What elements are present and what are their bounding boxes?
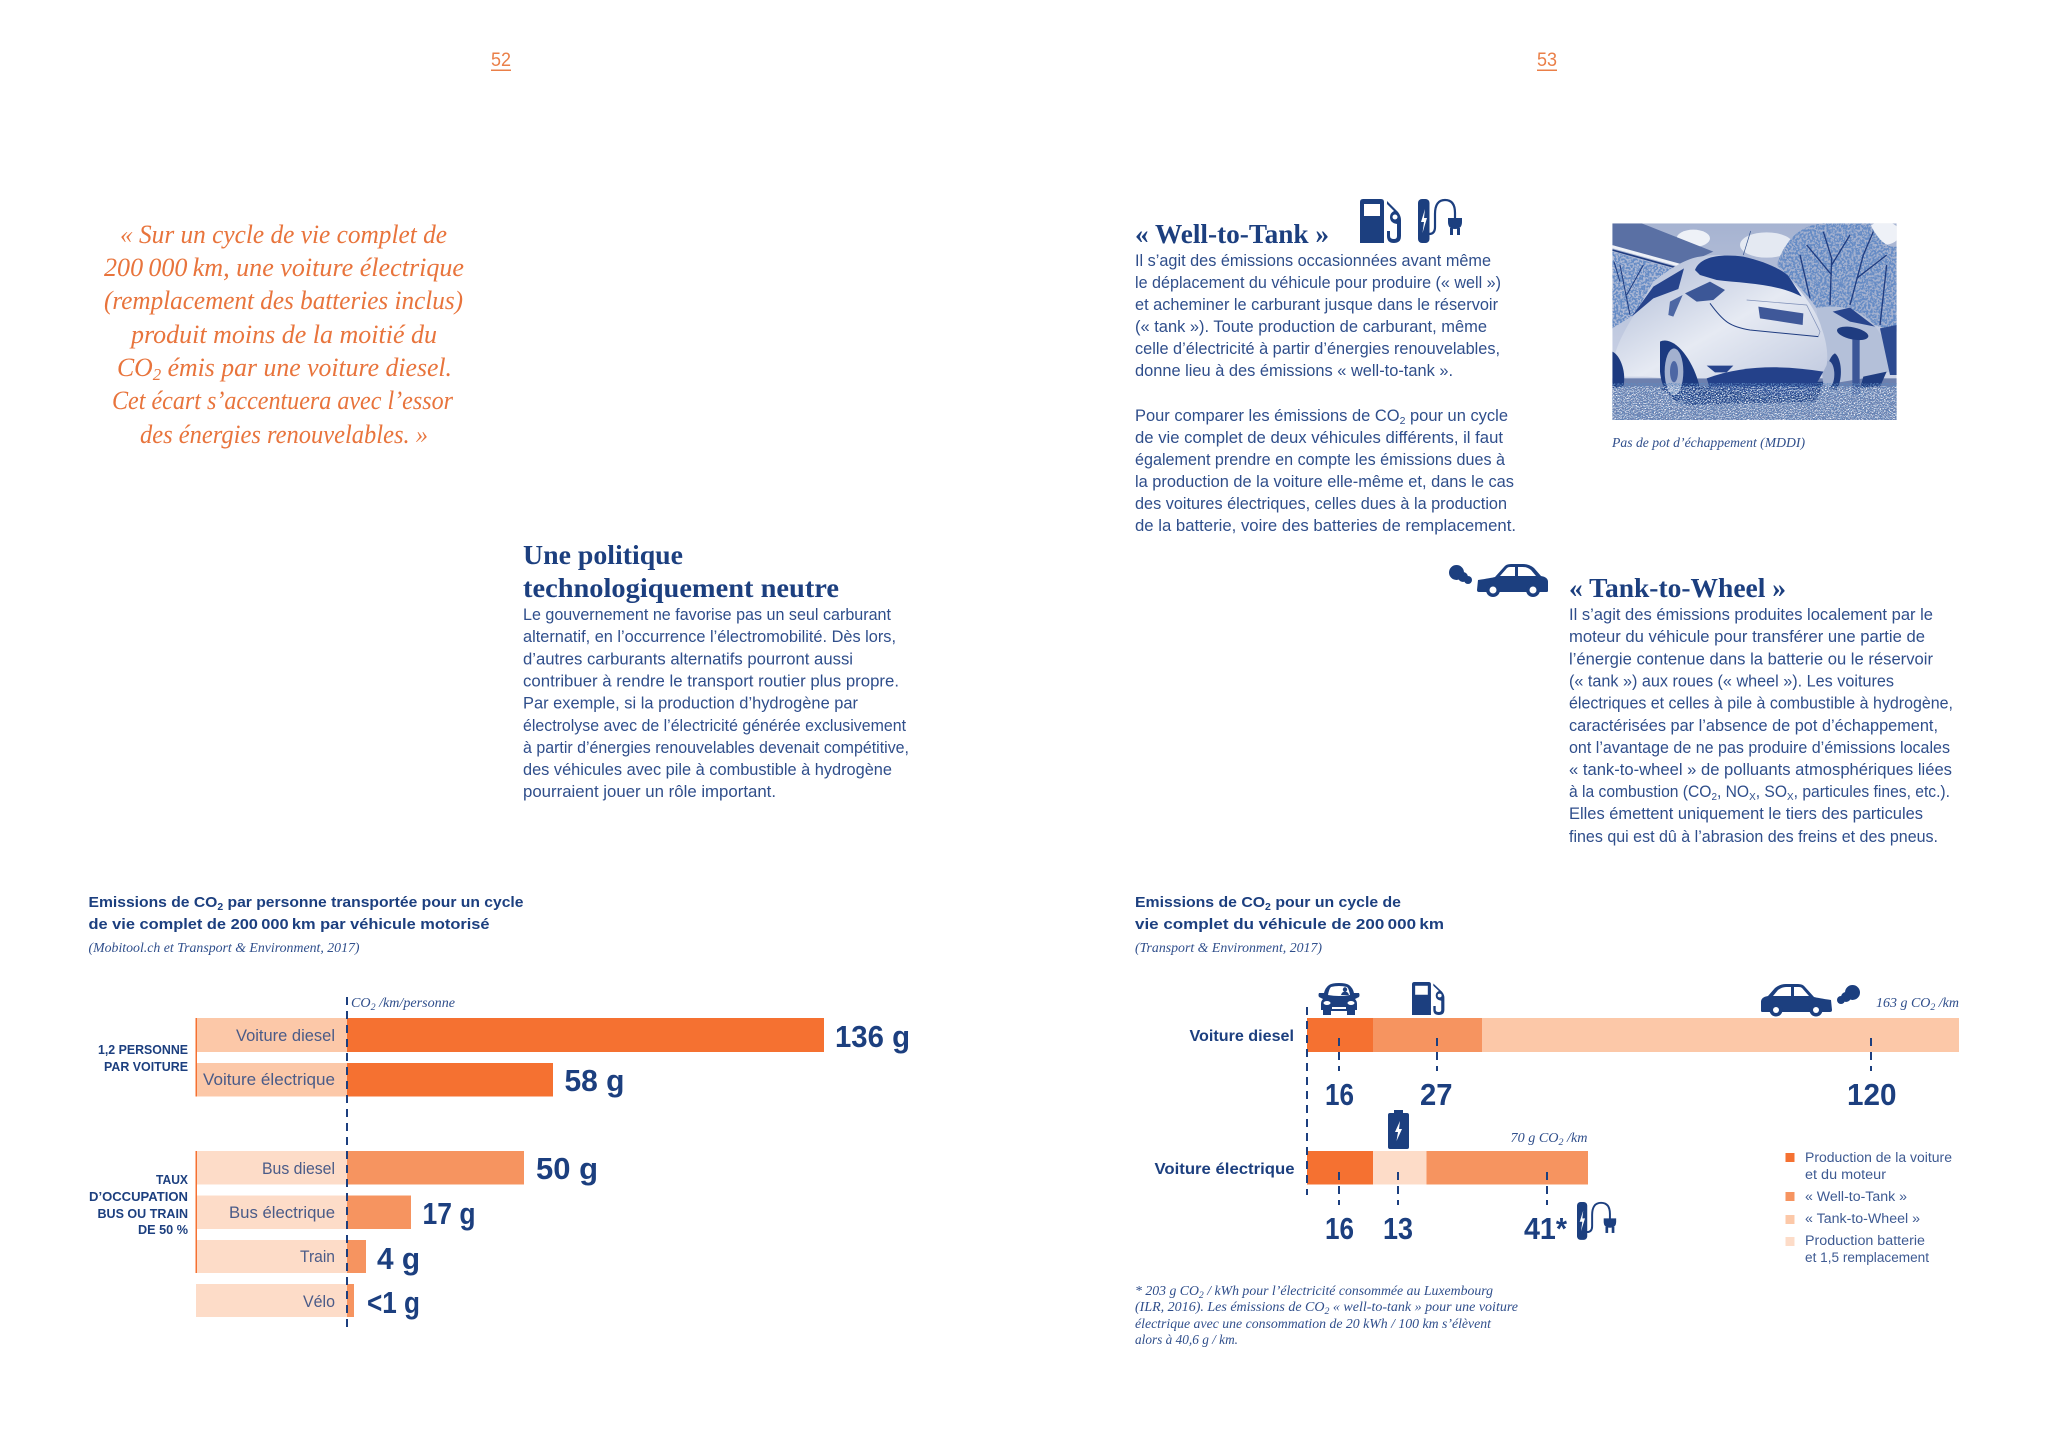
footnote	[1135, 1283, 1518, 1347]
group label: 1,2 personne	[98, 1018, 197, 1096]
text block: Well-to-Tank: et acheminer le carburant jusque dans le réservoir	[1135, 296, 1498, 314]
chart title: emissions per vehicle: 2	[1265, 902, 1271, 913]
icon: car with exhaust smoke	[1449, 564, 1548, 597]
values: diesel	[1325, 1077, 1896, 1112]
icon: car front with driver	[1318, 983, 1360, 1015]
text block: Tank-to-Wheel: ont l’avantage de ne pas produire d’émissions locales	[1569, 739, 1950, 757]
heading: Une politique technologiquement neutre: Une politique	[523, 539, 683, 570]
row: voiture electrique	[196, 1063, 624, 1098]
chart title: emissions per vehicle: vie complet du véhicule de 200 000 km	[1135, 916, 1444, 933]
photo caption: Pas de pot d’échappement (MDDI)	[1611, 435, 1806, 450]
total: 163 g: 2	[1930, 1003, 1936, 1013]
group label: 1,2 personne: PAR VOITURE	[104, 1059, 188, 1074]
group label: taux d'occupation	[89, 1151, 197, 1273]
footnote: 2	[1199, 1291, 1204, 1301]
chart title: emissions per vehicle: pour un cycle de	[1271, 894, 1401, 911]
footnote: / kWh pour l’électricité consommée au Luxembourg	[1204, 1283, 1493, 1298]
row: bus electrique: Bus électrique	[229, 1204, 335, 1222]
total: 70 g: 70 g CO	[1510, 1130, 1556, 1145]
row: bus electrique: 17 g	[422, 1196, 476, 1231]
text block: Tank-to-Wheel: X	[1749, 791, 1756, 803]
values: electrique: 13	[1383, 1211, 1413, 1246]
text block: Tank-to-Wheel: à la combustion (CO	[1569, 783, 1719, 801]
row: velo: Vélo	[303, 1293, 335, 1311]
chart title: emissions per person: de vie complet de 200 000 km par véhicule motorisé	[88, 916, 490, 933]
chart title: emissions per person: (Mobitool.ch et Transport & Environment, 2017)	[88, 940, 360, 955]
group label: taux d'occupation: BUS OU TRAIN	[98, 1206, 188, 1221]
row: voiture diesel: Voiture diesel	[236, 1027, 335, 1045]
text block: Tank-to-Wheel: fines qui est dû à l’abrasion des freins et des pneus.	[1569, 828, 1938, 846]
text block: politique neutre: des véhicules avec pile à combustible à hydrogène	[523, 761, 892, 779]
group label: taux d'occupation: TAUX	[156, 1172, 188, 1187]
text block: Tank-to-Wheel: (« tank ») aux roues (« wheel »). Les voitures	[1569, 673, 1894, 691]
heading: Une politique technologiquement neutre: technologiquement neutre	[523, 572, 839, 603]
icon: fuel pump	[1360, 199, 1401, 243]
footnote: 2	[1325, 1307, 1330, 1317]
row: train	[196, 1240, 420, 1276]
text block: Tank-to-Wheel: , NO	[1717, 783, 1749, 801]
axis and leader ticks	[1307, 1007, 1871, 1205]
total: 163 g: /km	[1935, 995, 1959, 1010]
row: bus electrique	[196, 1196, 476, 1231]
text block: Well-to-Tank: donne lieu à des émissions « well-to-tank ».	[1135, 362, 1453, 380]
pull quote: « Sur un cycle de vie complet de	[120, 220, 447, 249]
pull quote: Cet écart s’accentuera avec l’essor	[112, 386, 454, 415]
group label: taux d'occupation: DE 50 %	[138, 1222, 188, 1237]
row: bus diesel: Bus diesel	[262, 1160, 335, 1178]
icon: car with exhaust	[1761, 984, 1860, 1016]
row: train: Train	[300, 1248, 335, 1266]
text block: politique neutre: à partir d’énergies renouvelables devenait compétitive,	[523, 739, 909, 757]
icon: fuel pump small	[1412, 982, 1444, 1015]
chart title: emissions per vehicle: (Transport & Environment, 2017)	[1135, 940, 1323, 955]
pull quote: CO	[117, 353, 153, 382]
legend item: production batterie: et 1,5 remplacement	[1805, 1250, 1929, 1265]
text block: Well-to-Tank: le déplacement du véhicule pour produire (« well »)	[1135, 274, 1501, 292]
pull quote: 2	[153, 365, 162, 384]
text block: Tank-to-Wheel: caractérisées par l’absence de pot d’échappement,	[1569, 717, 1938, 735]
text block: Well-to-Tank	[1135, 252, 1516, 535]
chart title: emissions per person	[88, 894, 524, 955]
icon: battery	[1388, 1110, 1409, 1149]
row: bus diesel: 50 g	[536, 1151, 598, 1186]
heading: Tank-to-Wheel: « Tank-to-Wheel »	[1569, 572, 1786, 603]
legend item: production batterie	[1786, 1233, 1929, 1265]
text block: Tank-to-Wheel: Il s’agit des émissions produites localement par le	[1569, 606, 1933, 624]
pull quote: émis par une voiture diesel.	[161, 353, 452, 382]
row: velo	[196, 1284, 420, 1320]
footnote: alors à 40,6 g / km.	[1135, 1332, 1238, 1347]
chart title: emissions per person: par personne transportée pour un cycle	[223, 894, 524, 911]
text block: Well-to-Tank: Il s’agit des émissions occasionnées avant même	[1135, 252, 1491, 270]
text block: Well-to-Tank: celle d’électricité à partir d’énergies renouvelables,	[1135, 340, 1500, 358]
text block: Well-to-Tank: la production de la voiture elle-même et, dans le cas	[1135, 473, 1514, 491]
text block: Well-to-Tank: des voitures électriques, celles dues à la production	[1135, 495, 1507, 513]
text block: Tank-to-Wheel: « tank-to-wheel » de polluants atmosphériques liées	[1569, 761, 1952, 779]
unit label: /km/personne	[376, 995, 455, 1010]
text block: politique neutre: Le gouvernement ne favorise pas un seul carburant	[523, 606, 891, 624]
footnote: * 203 g CO	[1135, 1283, 1198, 1298]
row: voiture diesel	[196, 1018, 910, 1054]
text block: Tank-to-Wheel: , particules fines, etc.).	[1794, 783, 1950, 801]
row: velo: <1 g	[367, 1285, 420, 1320]
pull quote: 200 000 km, une voiture électrique	[104, 253, 464, 282]
values: diesel: 120	[1847, 1077, 1896, 1112]
footnote: (ILR, 2016). Les émissions de CO	[1135, 1299, 1318, 1314]
unit label: 2	[371, 1003, 376, 1013]
total: 163 g: 163 g CO	[1876, 995, 1929, 1010]
text block: Tank-to-Wheel: Elles émettent uniquement le tiers des particules	[1569, 805, 1923, 823]
row label: voiture diesel: Voiture diesel	[1190, 1028, 1294, 1045]
page number 53: 53	[1537, 50, 1557, 71]
legend item: production voiture: Production de la voiture	[1805, 1150, 1952, 1165]
heading: Well-to-Tank: « Well-to-Tank »	[1135, 218, 1329, 249]
pull quote	[104, 220, 464, 449]
text block: Well-to-Tank: 2	[1400, 415, 1406, 427]
pull quote: produit moins de la moitié du	[129, 320, 437, 349]
unit label: CO	[351, 995, 370, 1010]
legend item: production voiture: et du moteur	[1805, 1167, 1887, 1182]
text block: Tank-to-Wheel: moteur du véhicule pour transférer une partie de	[1569, 628, 1925, 646]
text block: Tank-to-Wheel: 2	[1711, 791, 1717, 803]
total: 70 g: 2	[1559, 1138, 1564, 1148]
group label: taux d'occupation: D’OCCUPATION	[89, 1189, 188, 1204]
text block: politique neutre: alternatif, en l’occurrence l’électromobilité. Dès lors,	[523, 628, 896, 646]
legend item: well-to-tank: « Well-to-Tank »	[1805, 1189, 1907, 1204]
text block: politique neutre	[523, 606, 909, 801]
stacked bar chart: lifecycle emissions	[1154, 982, 1959, 1246]
text block: Well-to-Tank: pour un cycle	[1405, 407, 1508, 425]
row label: voiture electrique: Voiture électrique	[1154, 1161, 1295, 1178]
text block: Tank-to-Wheel: X	[1787, 791, 1794, 803]
legend	[1786, 1150, 1952, 1265]
values: diesel: 27	[1420, 1077, 1452, 1112]
bar: voiture electrique	[1307, 1151, 1588, 1184]
row: voiture diesel: 136 g	[835, 1019, 910, 1054]
chart title: emissions per person: Emissions de CO	[88, 894, 212, 911]
text block: politique neutre: pourraient jouer un rôle important.	[523, 783, 776, 801]
text block: politique neutre: électrolyse avec de l’électricité générée exclusivement	[523, 717, 906, 735]
text block: Well-to-Tank: Pour comparer les émissions de CO	[1135, 407, 1400, 425]
row: train: 4 g	[377, 1241, 420, 1276]
values: electrique: 41*	[1524, 1211, 1568, 1246]
text block: Tank-to-Wheel: , SO	[1756, 783, 1787, 801]
text block: Well-to-Tank: également prendre en compte les émissions dues à	[1135, 451, 1506, 469]
row: bus diesel	[196, 1151, 598, 1186]
group label: 1,2 personne: 1,2 PERSONNE	[98, 1042, 188, 1057]
icon: charger plug small	[1577, 1202, 1616, 1240]
chart title: emissions per vehicle: Emissions de CO	[1135, 894, 1258, 911]
axis	[346, 997, 348, 1328]
text block: Tank-to-Wheel: électriques et celles à pile à combustible à hydrogène,	[1569, 695, 1953, 713]
text block: politique neutre: d’autres carburants alternatifs pourront aussi	[523, 650, 853, 668]
chart title: emissions per vehicle	[1135, 894, 1444, 955]
values: diesel: 16	[1325, 1077, 1354, 1112]
text block: politique neutre: Par exemple, si la production d’hydrogène par	[523, 695, 858, 713]
text block: Well-to-Tank: (« tank »). Toute production de carburant, même	[1135, 318, 1487, 336]
values: electrique: 16	[1325, 1211, 1354, 1246]
legend item: tank-to-wheel: « Tank-to-Wheel »	[1805, 1211, 1920, 1226]
row: voiture electrique: Voiture électrique	[203, 1071, 335, 1089]
text block: politique neutre: contribuer à rendre le transport routier plus propre.	[523, 673, 899, 691]
text block: Tank-to-Wheel	[1569, 606, 1953, 846]
pull quote: (remplacement des batteries inclus)	[104, 286, 463, 315]
row: voiture electrique: 58 g	[564, 1063, 624, 1098]
text block: Well-to-Tank: de vie complet de deux véhicules différents, il faut	[1135, 429, 1503, 447]
bar chart: CO2 per person	[89, 995, 910, 1328]
text block: Tank-to-Wheel: l’énergie contenue dans la batterie ou le réservoir	[1569, 650, 1934, 668]
icon: electric charger plug	[1418, 199, 1462, 243]
pull quote: des énergies renouvelables. »	[140, 420, 428, 449]
heading: Une politique technologiquement neutre	[523, 539, 839, 603]
bar: voiture diesel	[1307, 1018, 1959, 1052]
photo: electric cars parked	[1612, 222, 1900, 420]
legend item: production batterie: Production batterie	[1805, 1233, 1925, 1248]
legend item: production voiture	[1786, 1150, 1952, 1182]
chart title: emissions per person: 2	[217, 902, 224, 913]
footnote: électrique avec une consommation de 20 kWh / 100 km s’élèvent	[1135, 1316, 1492, 1331]
footnote: « well-to-tank » pour une voiture	[1329, 1299, 1518, 1314]
page number 52: 52	[491, 50, 511, 71]
values: electrique	[1325, 1211, 1568, 1246]
text block: Well-to-Tank: de la batterie, voire des batteries de remplacement.	[1135, 517, 1516, 535]
total: 70 g: /km	[1564, 1130, 1588, 1145]
